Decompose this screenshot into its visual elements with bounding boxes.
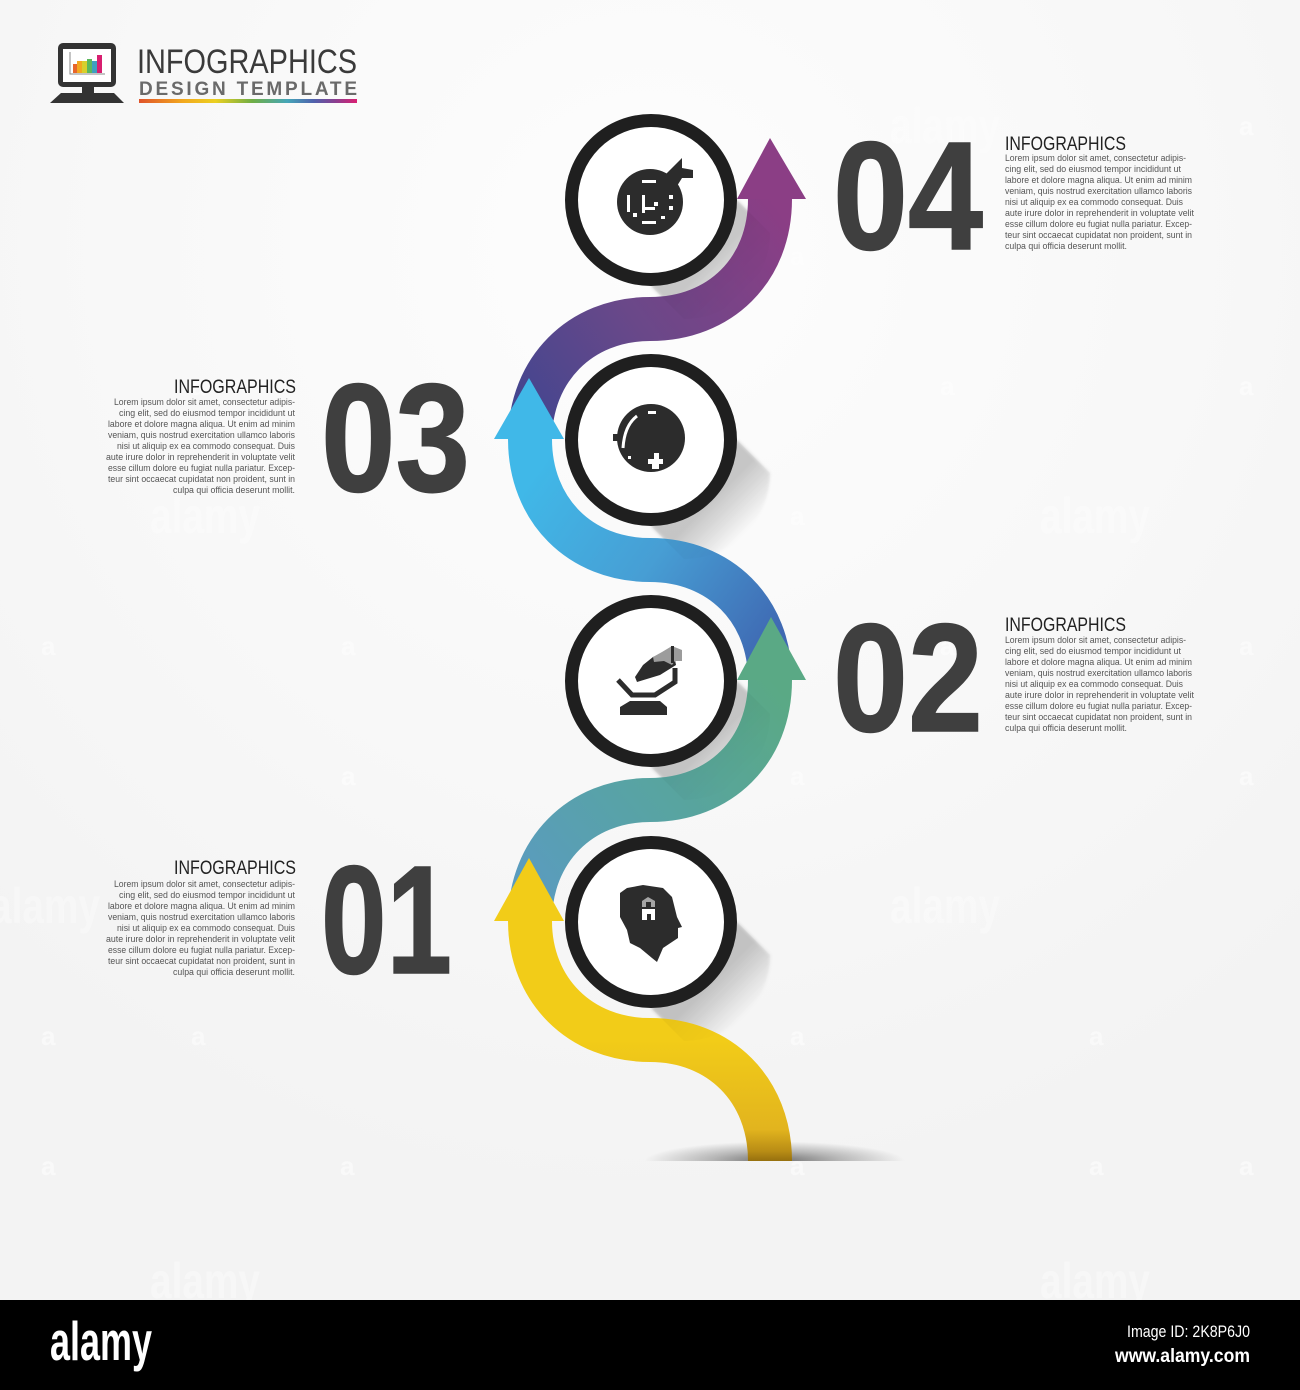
- watermarks: a: [1239, 631, 1254, 661]
- arrow path: [494, 138, 806, 1161]
- watermarks: alamy: [150, 1253, 260, 1309]
- watermarks: a: [1239, 1151, 1254, 1181]
- body 03: aute irure dolor in reprehenderit in voluptate velit: [106, 452, 296, 462]
- faint shadow cast on the arrows: [651, 200, 770, 1041]
- heading 03: INFOGRAPHICS: [174, 377, 296, 398]
- arrow segment 1: yellow: [494, 858, 770, 1161]
- watermarks: a: [790, 501, 805, 531]
- watermarks: a: [790, 241, 805, 271]
- step 4 circle with target icon: [572, 120, 730, 280]
- arrow segment 2: green: [530, 617, 806, 921]
- body 02: Lorem ipsum dolor sit amet, consectetur adipis-: [1005, 635, 1186, 645]
- body 02: teur sint occaecat cupidatat non proident, sunt in: [1005, 712, 1192, 722]
- body 03: cing elit, sed do eiusmod tempor incididunt ut: [119, 408, 296, 418]
- number 02: 02: [833, 592, 983, 764]
- watermarks: a: [1089, 1021, 1104, 1051]
- watermarks: a: [790, 1021, 805, 1051]
- body 02: culpa qui officia deserunt mollit.: [1005, 723, 1127, 733]
- text block 01: [106, 858, 296, 977]
- image id: Image ID: 2K8P6J0: [1127, 1322, 1250, 1341]
- circle long shadows behind the path: [651, 200, 770, 1041]
- watermarks: a: [1239, 761, 1254, 791]
- body 01: [106, 879, 296, 977]
- heading 01: INFOGRAPHICS: [174, 858, 296, 879]
- watermarks: a: [41, 1151, 56, 1181]
- body 02: [1005, 635, 1195, 733]
- watermarks: a: [790, 761, 805, 791]
- body 03: labore et dolore magna aliqua. Ut enim ad minim: [108, 419, 295, 429]
- heading 02: INFOGRAPHICS: [1005, 615, 1126, 636]
- step 1 circle with head icon: [572, 842, 730, 1002]
- body 01: esse cillum dolore eu fugiat nulla pariatur. Excep-: [108, 945, 295, 955]
- header logo: [50, 43, 357, 103]
- heading 04: INFOGRAPHICS: [1005, 134, 1126, 155]
- number 01: 01: [321, 834, 452, 1006]
- watermarks: a: [41, 631, 56, 661]
- watermarks: a: [341, 631, 356, 661]
- body 04: nisi ut aliquip ex ea commodo consequat. Duis: [1005, 197, 1184, 207]
- logo subtitle: DESIGN TEMPLATE: [139, 79, 357, 100]
- watermarks: alamy: [150, 488, 260, 544]
- body 02: nisi ut aliquip ex ea commodo consequat. Duis: [1005, 679, 1184, 689]
- number 03: 03: [321, 352, 470, 524]
- watermarks: alamy: [1040, 1253, 1150, 1309]
- body 02: veniam, quis nostrud exercitation ullamco laboris: [1005, 668, 1193, 678]
- body 01: cing elit, sed do eiusmod tempor incididunt ut: [119, 890, 296, 900]
- watermarks: alamy: [1040, 488, 1150, 544]
- body 03: teur sint occaecat cupidatat non proident, sunt in: [108, 474, 295, 484]
- body 02: esse cillum dolore eu fugiat nulla pariatur. Excep-: [1005, 701, 1192, 711]
- number 04: 04: [833, 110, 983, 282]
- rainbow underline: [139, 99, 357, 103]
- body 01: teur sint occaecat cupidatat non proident, sunt in: [108, 956, 295, 966]
- body 03: [106, 397, 296, 495]
- website: www.alamy.com: [1114, 1346, 1250, 1367]
- body 01: veniam, quis nostrud exercitation ullamco laboris: [108, 912, 296, 922]
- body 04: Lorem ipsum dolor sit amet, consectetur adipis-: [1005, 153, 1186, 163]
- body 04: culpa qui officia deserunt mollit.: [1005, 241, 1127, 251]
- watermarks: a: [41, 1021, 56, 1051]
- watermarks: a: [790, 1151, 805, 1181]
- ground shadow: [640, 1135, 910, 1161]
- step 3 circle with lens icon: [572, 360, 730, 520]
- body 03: Lorem ipsum dolor sit amet, consectetur adipis-: [114, 397, 295, 407]
- body 03: culpa qui officia deserunt mollit.: [173, 485, 295, 495]
- body 01: nisi ut aliquip ex ea commodo consequat. Duis: [117, 923, 296, 933]
- icon: lens: [613, 404, 685, 472]
- logo title: INFOGRAPHICS: [137, 43, 357, 81]
- body 01: Lorem ipsum dolor sit amet, consectetur adipis-: [114, 879, 295, 889]
- icon: satellite dish: [618, 646, 682, 715]
- body 01: culpa qui officia deserunt mollit.: [173, 967, 295, 977]
- watermarks: alamy: [890, 878, 1000, 934]
- body 04: aute irure dolor in reprehenderit in voluptate velit: [1005, 208, 1195, 218]
- watermarks: a: [940, 631, 955, 661]
- body 03: esse cillum dolore eu fugiat nulla pariatur. Excep-: [108, 463, 295, 473]
- watermarks: a: [340, 1151, 355, 1181]
- watermarks: a: [341, 761, 356, 791]
- watermarks: a: [940, 371, 955, 401]
- body 04: cing elit, sed do eiusmod tempor incididunt ut: [1005, 164, 1182, 174]
- body 02: aute irure dolor in reprehenderit in voluptate velit: [1005, 690, 1195, 700]
- body 01: labore et dolore magna aliqua. Ut enim ad minim: [108, 901, 295, 911]
- arrow segment 3: blue: [494, 378, 770, 680]
- watermarks: a: [1239, 371, 1254, 401]
- body 03: veniam, quis nostrud exercitation ullamco laboris: [108, 430, 296, 440]
- body 04: labore et dolore magna aliqua. Ut enim ad minim: [1005, 175, 1192, 185]
- body 02: labore et dolore magna aliqua. Ut enim ad minim: [1005, 657, 1192, 667]
- body 01: aute irure dolor in reprehenderit in voluptate velit: [106, 934, 296, 944]
- footer logo: alamy: [50, 1310, 152, 1372]
- body 04: teur sint occaecat cupidatat non proident, sunt in: [1005, 230, 1192, 240]
- text block 03: [106, 377, 296, 495]
- body 04: esse cillum dolore eu fugiat nulla pariatur. Excep-: [1005, 219, 1192, 229]
- body 03: nisi ut aliquip ex ea commodo consequat. Duis: [117, 441, 296, 451]
- arrow segment 4: purple: [530, 138, 806, 440]
- icon: target with arrow: [617, 158, 693, 235]
- step 2 circle with satellite dish icon: [572, 602, 730, 760]
- watermarks: a: [1089, 1151, 1104, 1181]
- icon: computer monitor with bar chart: [50, 43, 124, 103]
- watermarks: alamy: [890, 98, 1000, 154]
- body 04: veniam, quis nostrud exercitation ullamco laboris: [1005, 186, 1193, 196]
- icon: head with figure: [620, 885, 682, 962]
- text block 02: [1005, 615, 1195, 733]
- footer bar: [0, 1300, 1300, 1390]
- text block 04: [1005, 134, 1195, 251]
- body 04: [1005, 153, 1195, 251]
- watermarks: a: [191, 1021, 206, 1051]
- body 02: cing elit, sed do eiusmod tempor incididunt ut: [1005, 646, 1182, 656]
- watermarks: a: [191, 371, 206, 401]
- watermarks: a: [1239, 111, 1254, 141]
